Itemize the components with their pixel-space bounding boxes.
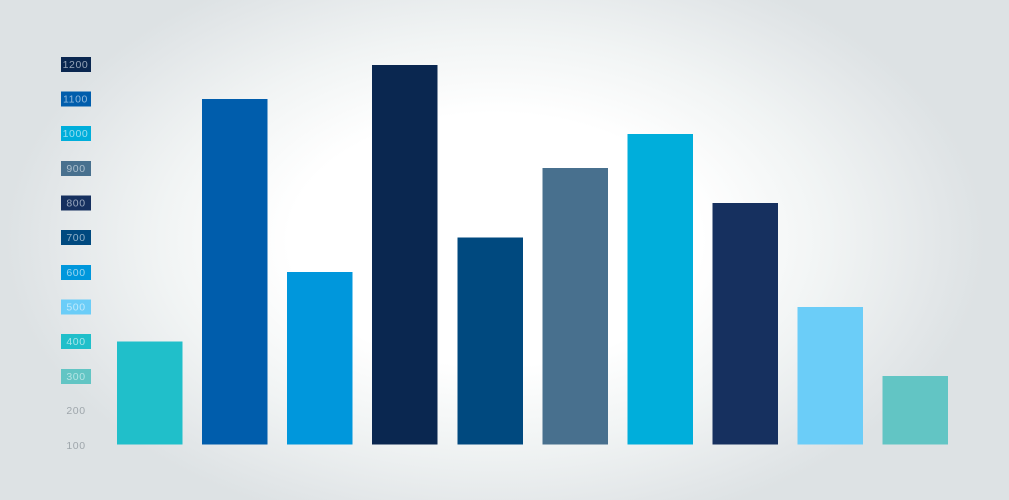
label 1000: 1000 (63, 128, 88, 140)
bar 900 (542, 168, 608, 444)
label 800: 800 (66, 198, 86, 210)
label 500: 500 (66, 302, 86, 314)
label 600 (61, 265, 91, 280)
y axis labels (61, 57, 91, 452)
bars (117, 65, 948, 444)
bar 800 (712, 203, 778, 444)
label 500 (61, 300, 91, 314)
label 1200: 1200 (63, 59, 88, 71)
label 400 (61, 334, 91, 349)
bar 1200 (372, 65, 438, 444)
label 700 (61, 230, 91, 245)
label 200: 200 (66, 405, 86, 417)
label 900: 900 (66, 163, 86, 175)
bar 700 (458, 238, 523, 444)
bar 1000 (628, 134, 693, 444)
label 1100: 1100 (63, 94, 88, 106)
label 1200 (61, 57, 91, 72)
label 1000 (61, 126, 91, 141)
bar 300 (882, 376, 948, 444)
label 900 (61, 161, 91, 176)
label 400: 400 (66, 336, 86, 348)
label 1100 (61, 92, 91, 106)
label 300: 300 (66, 371, 86, 383)
label 800 (61, 196, 91, 210)
label 100: 100 (66, 440, 86, 452)
label 600: 600 (66, 267, 86, 279)
bar 400 (117, 342, 182, 444)
bar 1100 (202, 99, 268, 444)
label 700: 700 (66, 232, 86, 244)
bar 500 (798, 307, 863, 444)
label 300 (61, 369, 91, 384)
bar 600 (287, 272, 352, 444)
